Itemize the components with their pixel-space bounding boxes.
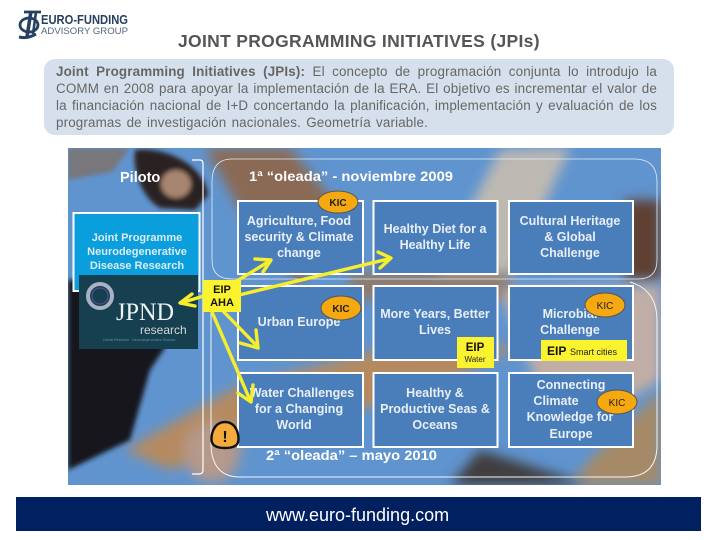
box: Agriculture, Food security & Climate change: [238, 201, 363, 274]
box: Microbial Challenge: [509, 286, 633, 360]
heading: second wave: 2ª “oleada” – mayo 2010: [266, 447, 437, 463]
diagram: JPI waves over photo background: [68, 148, 661, 485]
label: EIP AHA: AHA: [210, 297, 234, 309]
box: Healthy & Productive Seas & Oceans: Oceans: [412, 418, 458, 432]
box: Healthy Diet for a Healthy Life: Healthy Diet for a: [384, 222, 487, 236]
definition paragraph: la financiación nacional de I+D concertando la planificación, implementación y evaluación de los: [56, 98, 657, 113]
box: Connecting Climate Knowledge for Europe: Climate: [533, 394, 579, 408]
label: EIP AHA: EIP: [213, 284, 231, 296]
box: Agriculture, Food security & Climate change: Agriculture, Food: [247, 214, 351, 228]
icon: warning: [211, 422, 239, 448]
box: Water Challenges for a Changing World: Water Challenges: [250, 386, 354, 400]
outline: first wave group: [212, 159, 657, 279]
box: JPND research logo: Global Research · Neurodegenerative Disease: [103, 338, 176, 342]
box: JPND research logo: [79, 275, 198, 349]
box: Microbial Challenge: Challenge: [540, 323, 600, 337]
logo: Euro-Funding Advisory Group: ADVISORY GROUP: [41, 26, 128, 37]
arrows: from EIP AHA: [180, 252, 391, 402]
definition paragraph: programas de investigación nacionales. Geometría variable.: [56, 115, 428, 130]
definition paragraph: COMM en 2008 para apoyar la implementación de la ERA. El objetivo es incrementar el valor de: [56, 81, 657, 96]
box: Connecting Climate Knowledge for Europe: Europe: [549, 427, 593, 441]
box: JPND research logo: research: [140, 323, 187, 337]
label: EIP Water: Water: [464, 355, 486, 364]
badge: KIC Urban Europe: KIC: [332, 304, 350, 315]
logo: Euro-Funding Advisory Group: [18, 10, 128, 40]
label: EIP Smart cities: [541, 340, 627, 361]
heading: first wave: 1ª “oleada” - noviembre 2009: [249, 168, 453, 184]
panel: definition text: [44, 59, 674, 135]
definition paragraph: Joint Programming Initiatives (JPIs): El concepto de programación conjunta lo introdujo la: [56, 64, 657, 79]
box: Water Challenges for a Changing World: World: [276, 418, 312, 432]
box: Cultural Heritage & Global Challenge: [509, 201, 633, 274]
outline: second wave group: [211, 282, 657, 477]
definition paragraph: [56, 64, 657, 130]
box: Connecting Climate Knowledge for Europe: [509, 373, 633, 447]
label: EIP Smart cities: Smart cities: [570, 347, 618, 357]
outline: Piloto group: [192, 160, 203, 474]
box: Healthy Diet for a Healthy Life: Healthy Life: [400, 238, 470, 252]
badge: KIC Microbial: [585, 293, 625, 317]
box: Connecting Climate Knowledge for Europe: Knowledge for: [527, 410, 614, 424]
icon: warning: !: [222, 429, 228, 446]
label: EIP Smart cities: EIP: [547, 344, 566, 358]
badge: KIC Urban Europe: [321, 296, 361, 320]
label: EIP Water: [457, 337, 494, 368]
badge: KIC Agriculture: [318, 191, 358, 213]
photo background: [68, 148, 661, 485]
box: Cultural Heritage & Global Challenge: & Global: [544, 230, 596, 244]
box: Agriculture, Food security & Climate change: change: [277, 246, 321, 260]
box: Joint Programme Neurodegenerative Disease Research: Neurodegenerative: [87, 246, 187, 258]
box: Urban Europe: Urban Europe: [258, 315, 340, 329]
box: Healthy & Productive Seas & Oceans: [374, 373, 498, 447]
box: Water Challenges for a Changing World: [238, 373, 363, 447]
footer bar: [16, 497, 701, 531]
badge: KIC Connecting Climate: [597, 390, 637, 414]
badge: KIC Connecting Climate: KIC: [609, 398, 625, 409]
title: JOINT PROGRAMMING INITIATIVES (JPIs): [178, 31, 540, 51]
box: Healthy & Productive Seas & Oceans: Productive Seas &: [380, 402, 490, 416]
footer URL: www.euro-funding.com: [266, 505, 449, 525]
box: Joint Programme Neurodegenerative Disease Research: Joint Programme: [92, 232, 182, 244]
box: More Years, Better Lives: Lives: [419, 323, 451, 337]
box: Cultural Heritage & Global Challenge: Challenge: [540, 246, 600, 260]
heading: Piloto: Piloto: [120, 170, 160, 186]
badge: KIC Agriculture: KIC: [329, 198, 347, 209]
label: EIP AHA: [203, 280, 241, 312]
box: Water Challenges for a Changing World: for a Changing: [255, 402, 343, 416]
box: Joint Programme Neurodegenerative Disease Research: Disease Research: [90, 260, 184, 272]
box: JPND research logo: JPND: [116, 299, 174, 326]
box: Connecting Climate Knowledge for Europe: Connecting: [537, 378, 605, 392]
box: Cultural Heritage & Global Challenge: Cultural Heritage: [520, 214, 620, 228]
badge: KIC Microbial: KIC: [597, 301, 613, 312]
label: EIP Water: EIP: [466, 342, 485, 354]
box: Joint Programme Neurodegenerative Disease Research: [74, 213, 200, 291]
box: More Years, Better Lives: More Years, Better: [380, 307, 490, 321]
box: Urban Europe: [238, 286, 363, 360]
box: Healthy Diet for a Healthy Life: [374, 201, 498, 274]
box: More Years, Better Lives: [374, 286, 498, 360]
box: Microbial Challenge: Microbial: [543, 307, 597, 321]
box: Agriculture, Food security & Climate change: security & Climate: [244, 230, 354, 244]
box: Healthy & Productive Seas & Oceans: Healthy &: [406, 386, 464, 400]
